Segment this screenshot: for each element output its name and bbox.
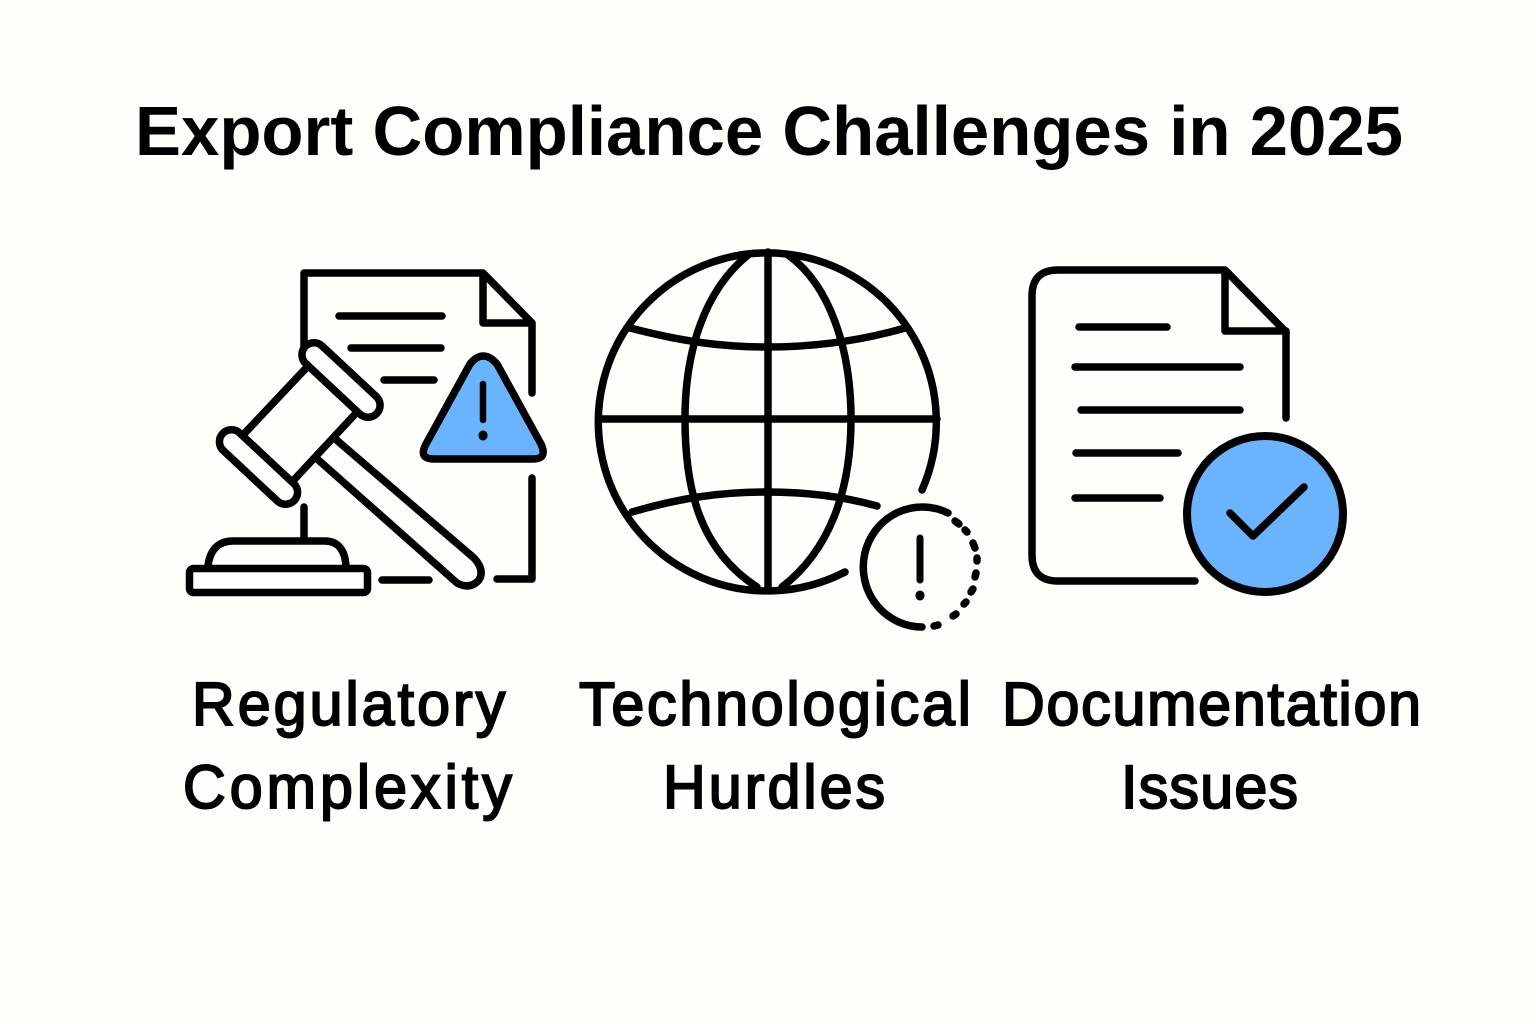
check badge	[1187, 436, 1343, 592]
globe meridian	[764, 252, 772, 588]
gavel stem	[300, 507, 308, 540]
globe outline	[598, 253, 936, 591]
label: regulatory complexity: Complexity	[183, 753, 512, 821]
gavel head	[242, 365, 358, 483]
document text lines	[1075, 327, 1240, 498]
title: Export Compliance Challenges in 2025	[135, 92, 1403, 170]
label: documentation issues	[1002, 670, 1421, 821]
warning triangle	[423, 356, 543, 459]
check mark	[1230, 487, 1304, 536]
icon: document with check badge	[1032, 270, 1343, 592]
alert circle	[863, 507, 948, 627]
alert exclamation dot	[916, 595, 924, 596]
label: documentation issues: Issues	[1121, 753, 1298, 821]
globe equator	[600, 415, 937, 423]
label: regulatory complexity: Regulatory	[192, 670, 505, 738]
document text lines	[339, 316, 442, 380]
icon: gavel with warning document	[190, 273, 543, 592]
gavel bottom cap	[214, 425, 303, 509]
gavel top cap	[297, 338, 385, 422]
gavel block base	[190, 568, 368, 592]
gavel block dome	[208, 541, 346, 566]
alert exclamation mark	[916, 538, 924, 580]
document fold	[483, 275, 532, 323]
globe upper latitude	[630, 328, 905, 347]
document fold	[1225, 272, 1286, 331]
gavel handle	[315, 437, 481, 586]
alert dotted arc	[934, 521, 977, 626]
label: documentation issues: Documentation	[1002, 670, 1421, 738]
globe right meridian	[782, 255, 851, 587]
label: technological hurdles: Hurdles	[663, 753, 885, 821]
document outline	[304, 273, 532, 580]
globe lower latitude	[632, 492, 877, 512]
document outline	[1032, 270, 1286, 581]
icon: globe with alert	[598, 252, 977, 627]
label: technological hurdles	[579, 670, 971, 821]
globe left meridian	[685, 255, 757, 587]
label: technological hurdles: Technological	[579, 670, 971, 738]
label: regulatory complexity	[183, 670, 512, 821]
